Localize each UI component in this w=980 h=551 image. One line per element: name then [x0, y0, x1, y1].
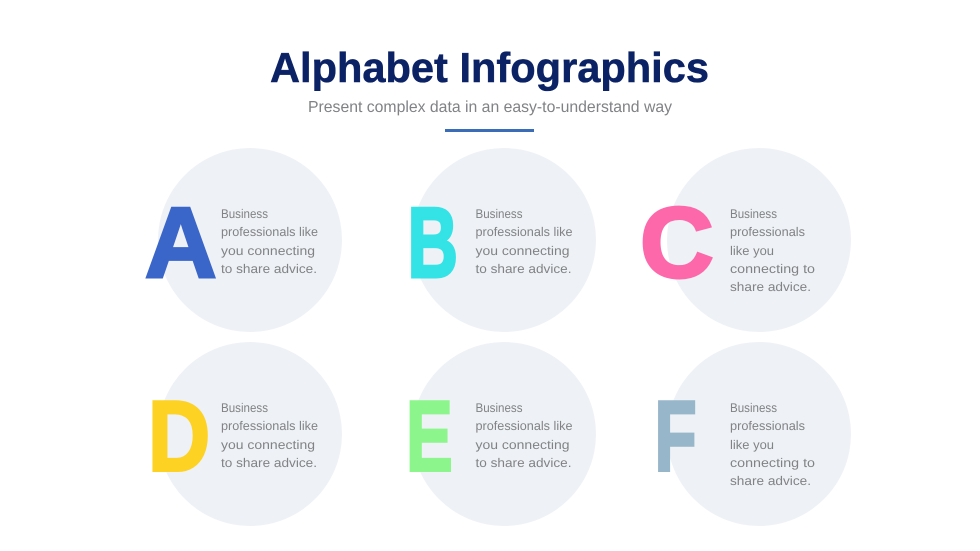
text A: Business: [221, 207, 268, 221]
letter F: F: [654, 380, 697, 492]
letter D: D: [148, 380, 210, 492]
text A: [221, 207, 318, 276]
text A: you connecting: [221, 244, 315, 258]
circle C: [667, 148, 851, 332]
text C: Business: [730, 207, 777, 221]
text F: share advice.: [730, 474, 811, 488]
text D: professionals like: [221, 419, 318, 433]
letter B: B: [408, 187, 458, 299]
text F: connecting to: [730, 456, 815, 470]
text F: [730, 401, 815, 488]
text B: to share advice.: [476, 262, 572, 276]
circle D: [158, 342, 342, 526]
text C: connecting to: [730, 262, 815, 276]
text F: professionals: [730, 419, 805, 433]
letter A: A: [145, 187, 216, 299]
text E: you connecting: [476, 438, 570, 452]
text E: [476, 401, 572, 470]
title: Alphabet Infographics: [270, 44, 709, 91]
text B: [476, 207, 572, 276]
text C: like you: [730, 244, 774, 258]
text F: Business: [730, 401, 777, 415]
circle B: [412, 148, 596, 332]
text C: [730, 207, 815, 294]
text B: Business: [476, 207, 522, 221]
text A: to share advice.: [221, 262, 317, 276]
circle F: [667, 342, 851, 526]
circle E: [412, 342, 596, 526]
text F: like you: [730, 438, 774, 452]
text A: professionals like: [221, 225, 318, 239]
text B: professionals like: [476, 225, 572, 239]
letter E: E: [406, 380, 453, 492]
text D: [221, 401, 318, 470]
letter C: C: [640, 187, 714, 299]
panel: E: [406, 342, 596, 526]
panel: F: [654, 342, 851, 526]
panel: D: [148, 342, 342, 526]
title underline: [445, 129, 534, 132]
subtitle: Present complex data in an easy-to-understand way: [308, 99, 672, 116]
circle A: [158, 148, 342, 332]
text D: to share advice.: [221, 456, 317, 470]
text E: professionals like: [476, 419, 572, 433]
text B: you connecting: [476, 244, 570, 258]
text E: to share advice.: [476, 456, 572, 470]
panel: B: [408, 148, 596, 332]
text D: you connecting: [221, 438, 315, 452]
text D: Business: [221, 401, 268, 415]
text C: share advice.: [730, 280, 811, 294]
text E: Business: [476, 401, 522, 415]
panel: A: [145, 148, 342, 332]
panel: C: [640, 148, 851, 332]
text C: professionals: [730, 225, 805, 239]
